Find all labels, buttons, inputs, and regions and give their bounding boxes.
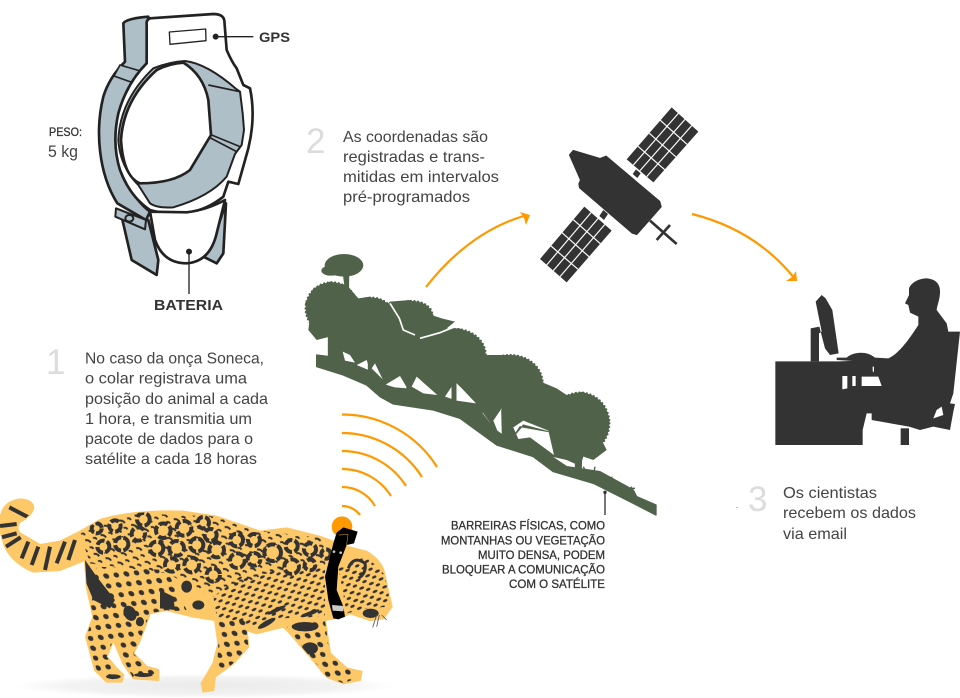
arrow: forest to satellite: [426, 212, 530, 287]
step 3 text: [783, 485, 916, 543]
arrow: satellite to scientist: [692, 214, 797, 281]
step 2 number: 2: [306, 122, 325, 161]
canopy edge lobes: [306, 282, 609, 454]
undergrowth: [583, 467, 635, 492]
collar illustration: [99, 14, 253, 294]
barriers caption: BARREIRAS FÍSICAS, COMO: [451, 518, 605, 532]
strap loop: [114, 65, 143, 85]
gaps between crowns and trunks: [343, 352, 580, 466]
coat markings: [0, 507, 390, 683]
barriers caption: [441, 518, 605, 591]
label: weight: PESO:: [49, 125, 82, 139]
label: GPS: GPS: [259, 29, 290, 45]
step 2 text: pré-programados: [343, 189, 470, 206]
solar panels: [540, 107, 698, 282]
barriers caption: BLOQUEAR A COMUNICAÇÃO: [442, 562, 605, 576]
jaguar body: [0, 499, 392, 692]
desk: [775, 360, 873, 445]
step 1 number: 1: [46, 343, 65, 382]
scientist at computer: [775, 278, 960, 445]
GPS collar on neck: [325, 527, 358, 619]
label: bateria: BATERIA: [154, 297, 223, 314]
whiskers: [373, 615, 387, 627]
step 3 text: via email: [783, 526, 847, 543]
step 2 text: registradas e trans-: [343, 149, 485, 166]
step 2 text: [343, 129, 499, 206]
forest on hillside: [305, 254, 656, 515]
dark flank: [85, 560, 175, 610]
broken curves on back: [80, 513, 327, 597]
tree crown top: [321, 254, 363, 290]
barriers caption: MONTANHAS OU VEGETAÇÃO: [441, 534, 605, 548]
step 1 text: pacote de dados para o: [85, 431, 253, 448]
hillside ground: [317, 355, 656, 515]
signal waves: [342, 414, 437, 515]
muzzle: [363, 609, 379, 618]
padding dividers: [208, 85, 240, 152]
rosettes on back: [92, 513, 331, 582]
ring opening: [121, 63, 211, 183]
GPS leader: [214, 35, 253, 38]
antenna: [650, 221, 677, 244]
GPS screen: [169, 29, 206, 44]
step 1 text: satélite a cada 18 horas: [85, 451, 257, 468]
battery: [150, 200, 225, 263]
tail stripes: [0, 507, 75, 570]
battery leader: [187, 250, 191, 294]
bottom flaps: [122, 203, 226, 275]
satellite: [540, 107, 698, 282]
ground shadow: [15, 674, 395, 698]
step 1 text: [85, 350, 268, 468]
step 1 text: o colar registrava uma: [85, 371, 247, 388]
step 1 text: No caso da onça Soneca,: [85, 350, 264, 368]
step 3 number: 3: [748, 480, 767, 519]
chair post: [901, 428, 909, 445]
label: weight: 5 kg: [48, 143, 78, 161]
step 3 text: Os cientistas: [783, 485, 877, 502]
step 3 text: recebem os dados: [783, 505, 916, 522]
small spots on shoulders and head: [213, 563, 325, 627]
ear: [348, 560, 365, 578]
monitor: [811, 295, 839, 361]
tree trunks: [328, 335, 582, 470]
barriers caption: MUITO DENSA, PODEM: [478, 548, 605, 562]
small mark beside 3: [736, 507, 738, 508]
step 2 text: As coordenadas são: [343, 129, 488, 146]
satellite body: [570, 151, 661, 234]
step 1 text: posição do animal a cada: [85, 391, 268, 408]
barriers caption: COM O SATÉLITE: [509, 576, 605, 591]
label: weight: [48, 125, 82, 161]
canopy mass: [305, 282, 610, 467]
main ring and GPS housing: [115, 14, 253, 213]
leader line: [603, 491, 607, 515]
step 1 text: 1 hora, e transmitia um: [85, 411, 252, 428]
large blotches: [106, 581, 320, 679]
inner padding: [118, 61, 244, 207]
step 2 text: mitidas em intervalos: [343, 169, 499, 186]
buckle: [115, 208, 146, 229]
person and chair: [837, 278, 960, 430]
left strap: [99, 17, 150, 220]
gaps under keyboard: [842, 367, 943, 418]
signal source dot: [332, 516, 352, 537]
jaguar: [0, 499, 392, 692]
mixed spots on flank and legs: [87, 567, 187, 680]
